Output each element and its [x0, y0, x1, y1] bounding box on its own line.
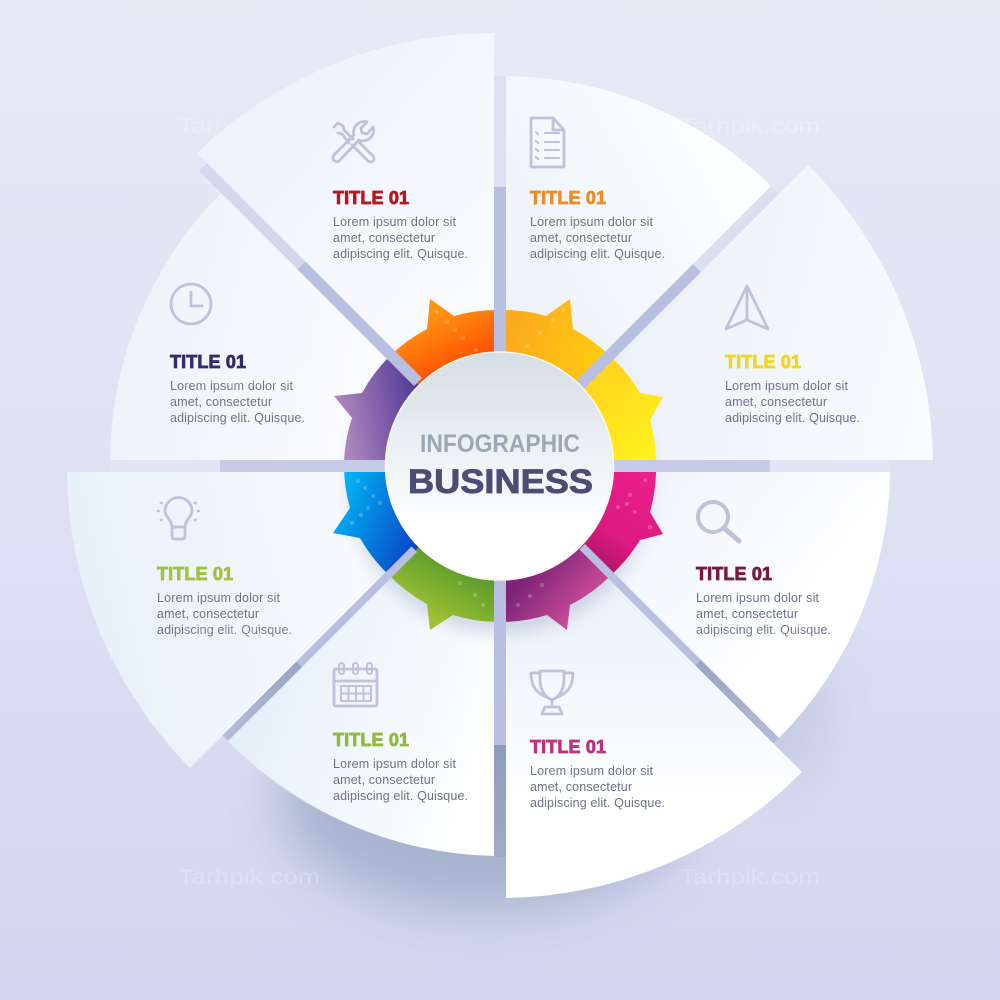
title: TITLE 01 — [530, 737, 606, 757]
panel: trophy — [506, 476, 802, 898]
gear segment: yellow — [500, 356, 663, 466]
body text: adipiscing elit. Quisque. — [530, 247, 665, 261]
watermarks — [178, 115, 820, 889]
icon: checklist — [531, 118, 564, 167]
body text: amet, consectetur — [725, 395, 827, 409]
panel shape — [197, 33, 494, 450]
watermarks: Tarhpik.com — [680, 366, 820, 389]
icon: clock — [171, 284, 211, 324]
gap strips: outer light portions — [110, 76, 890, 857]
body text: Lorem ipsum dolor sit — [170, 379, 294, 393]
icon: paper plane — [726, 286, 768, 329]
icon: magnifier — [698, 502, 739, 541]
gear segment: amber — [500, 299, 610, 466]
body text: amet, consectetur — [696, 607, 798, 621]
panel: calendar — [228, 475, 494, 856]
gear segment: purple — [334, 356, 500, 466]
body text: Lorem ipsum dolor sit — [725, 379, 849, 393]
panel shape — [506, 76, 771, 451]
gear segment: orange — [390, 299, 500, 466]
panel shape — [513, 472, 890, 738]
body text: amet, consectetur — [170, 395, 272, 409]
icon: tools — [333, 122, 374, 162]
icon: light bulb — [158, 498, 198, 539]
watermarks: Tarhpik.com — [680, 866, 820, 889]
body text: amet, consectetur — [530, 780, 632, 794]
body text: Lorem ipsum dolor sit — [333, 757, 457, 771]
title: TITLE 01 — [170, 352, 246, 372]
panel shape — [506, 476, 802, 898]
body text — [157, 591, 292, 637]
title: TITLE 01 — [333, 730, 409, 750]
dotted watermark pattern on gear — [350, 308, 652, 607]
panel: document — [506, 76, 771, 451]
gap strips: inner darker portions — [220, 187, 779, 745]
heading: INFOGRAPHIC: INFOGRAPHIC — [420, 430, 580, 458]
icon: trophy — [531, 671, 573, 714]
panel: idea — [67, 472, 486, 768]
body text — [530, 215, 665, 261]
body text — [170, 379, 305, 425]
panel: search — [513, 472, 890, 738]
body text: amet, consectetur — [157, 607, 259, 621]
gear segment: green — [390, 466, 500, 630]
title: TITLE 01 — [696, 564, 772, 584]
body text: adipiscing elit. Quisque. — [333, 789, 468, 803]
body text: Lorem ipsum dolor sit — [696, 591, 820, 605]
gear segment: blue — [333, 466, 500, 576]
body text: amet, consectetur — [333, 231, 435, 245]
body text — [333, 215, 468, 261]
panel shape — [110, 193, 488, 460]
panel: tools — [197, 33, 494, 450]
watermarks over panels: Tarhpik.com — [178, 617, 320, 640]
central gear wheel — [333, 299, 663, 630]
title: TITLE 01 — [333, 188, 409, 208]
heading: BUSINESS: BUSINESS — [408, 463, 593, 501]
title: TITLE 01 — [530, 188, 606, 208]
center disc — [386, 352, 614, 580]
panel shape — [67, 472, 486, 768]
body text: adipiscing elit. Quisque. — [696, 623, 831, 637]
body text: adipiscing elit. Quisque. — [530, 796, 665, 810]
body text: adipiscing elit. Quisque. — [333, 247, 468, 261]
panel: clock — [110, 193, 488, 460]
title: TITLE 01 — [725, 352, 801, 372]
body text: Lorem ipsum dolor sit — [333, 215, 457, 229]
title: TITLE 01 — [157, 564, 233, 584]
body text: Lorem ipsum dolor sit — [157, 591, 281, 605]
body text — [333, 757, 468, 803]
watermarks: Tarhpik.com — [178, 115, 320, 138]
body text: adipiscing elit. Quisque. — [170, 411, 305, 425]
panel shape — [513, 165, 933, 460]
panel shape — [228, 475, 494, 856]
gear segment: magenta — [500, 466, 663, 576]
watermarks over panels — [178, 367, 820, 640]
panel: navigation — [513, 165, 933, 460]
soft shadow under gear — [348, 330, 652, 634]
body text: adipiscing elit. Quisque. — [725, 411, 860, 425]
body text: Lorem ipsum dolor sit — [530, 764, 654, 778]
body text — [530, 764, 665, 810]
body text — [696, 591, 831, 637]
body text: amet, consectetur — [530, 231, 632, 245]
body text: Lorem ipsum dolor sit — [530, 215, 654, 229]
watermarks: Tarhpik.com — [680, 115, 820, 138]
drop shadow beneath the wheel — [280, 635, 830, 912]
body text: adipiscing elit. Quisque. — [157, 623, 292, 637]
watermarks: Tarhpik.com — [178, 866, 320, 889]
gear segment: plum — [500, 466, 610, 630]
watermarks over panels: Tarhpik.com — [680, 617, 820, 640]
body text: amet, consectetur — [333, 773, 435, 787]
icon: calendar — [334, 663, 377, 706]
body text — [725, 379, 860, 425]
watermarks over panels: Tarhpik.com — [178, 367, 320, 390]
